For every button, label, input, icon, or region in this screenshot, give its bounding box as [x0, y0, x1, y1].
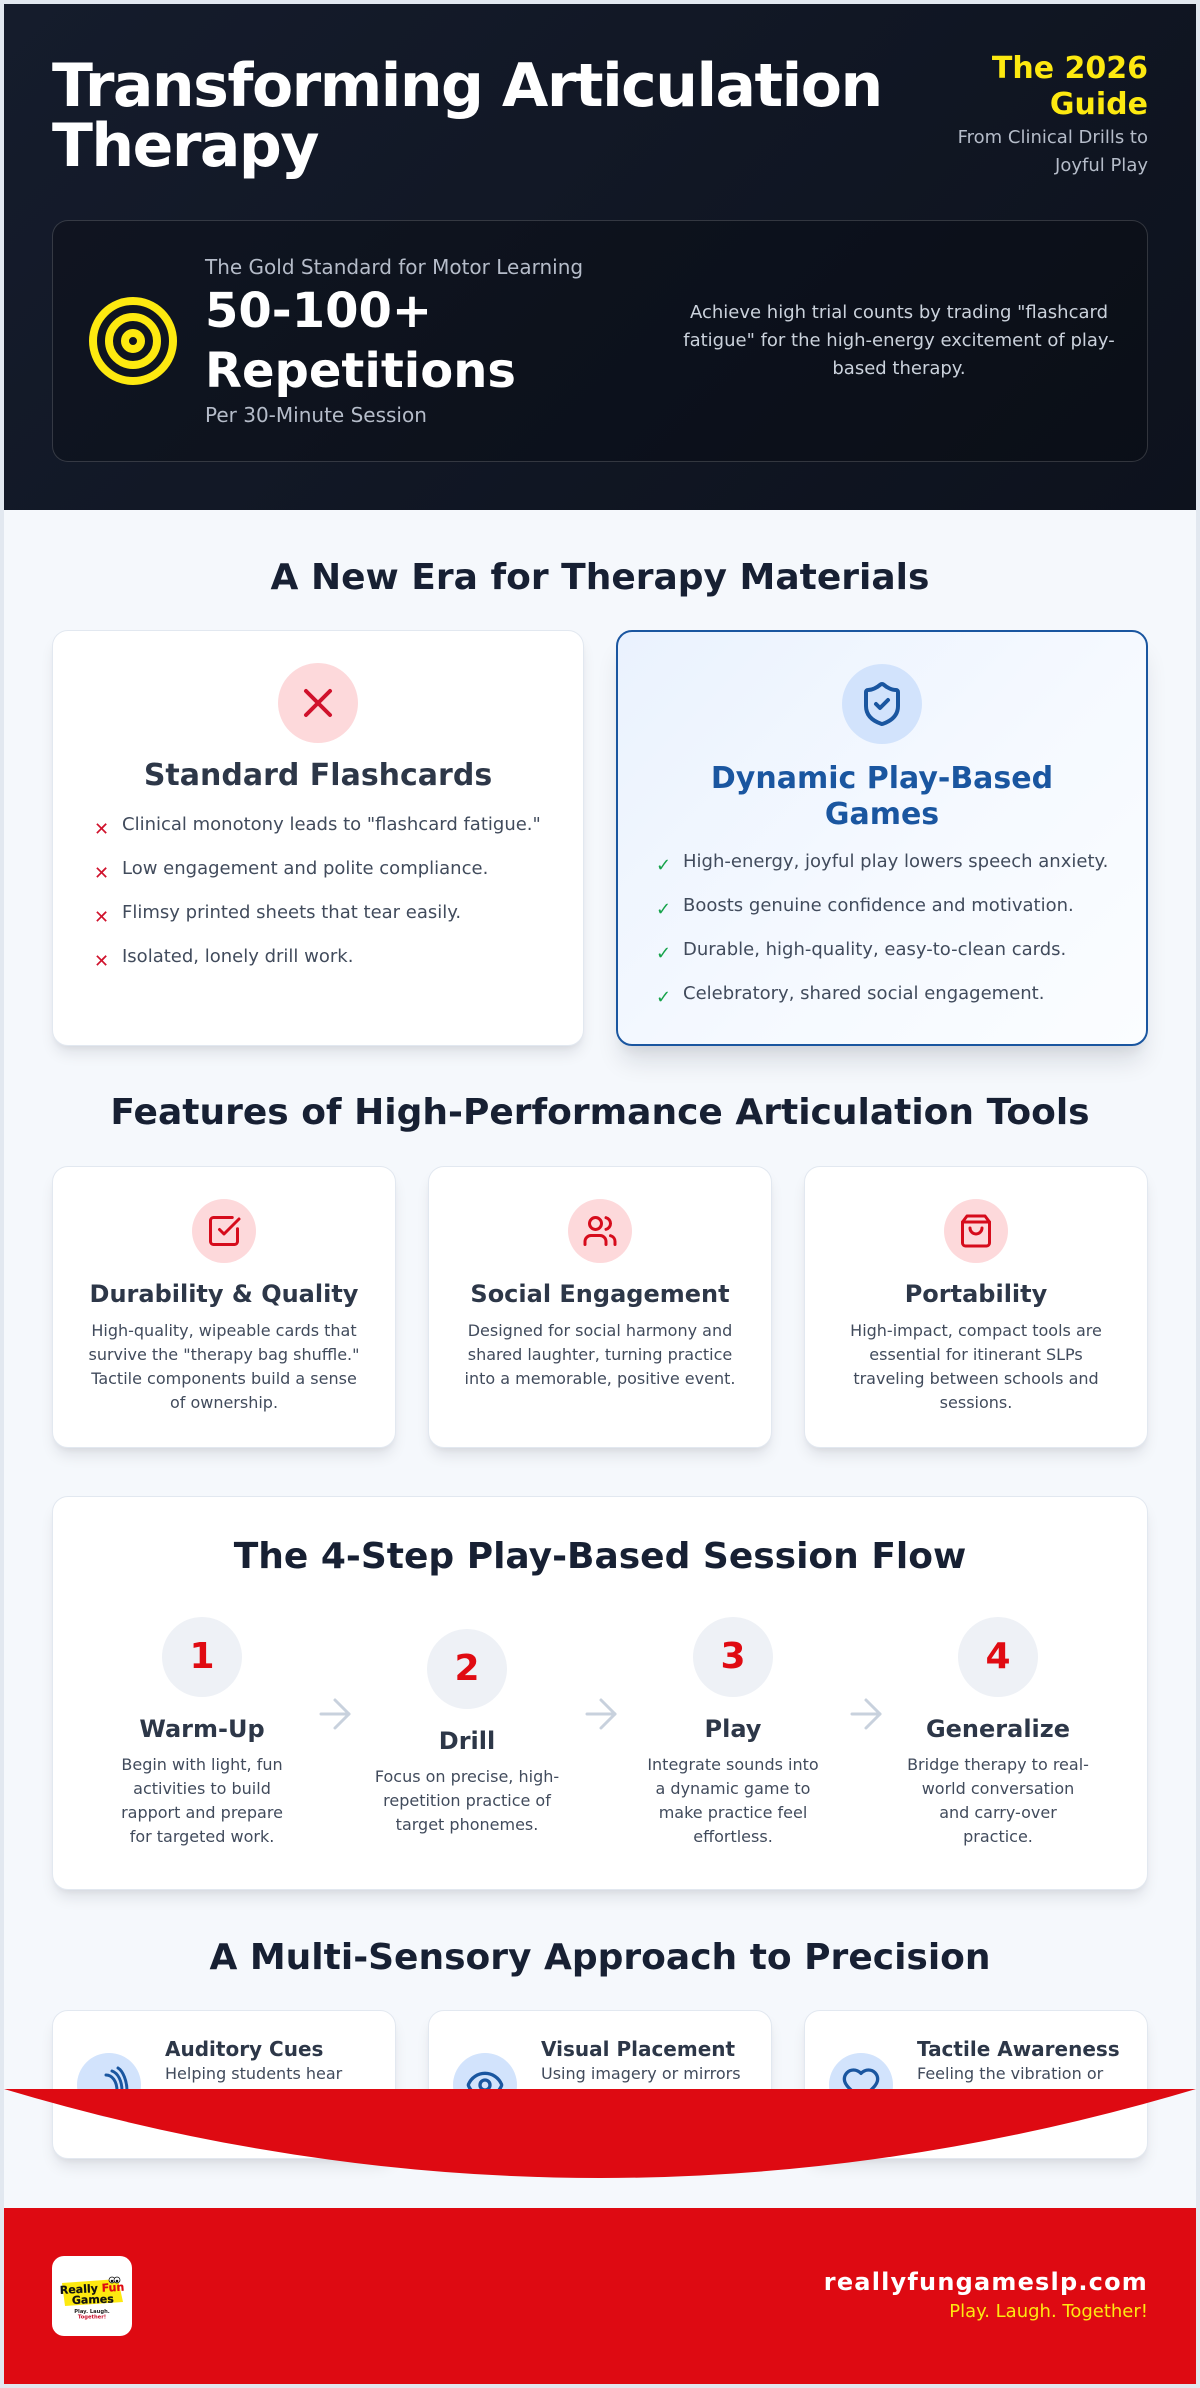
- step text: target phonemes.: [396, 1815, 538, 1834]
- list: benefits: ✓: [656, 855, 671, 876]
- arrow: [320, 1698, 350, 1730]
- panel: standard flashcards: [52, 630, 584, 1046]
- panel: portability: [804, 1166, 1148, 1448]
- feature title: Portability: [905, 1280, 1047, 1308]
- title: Therapy: [52, 111, 318, 181]
- step text: a dynamic game to: [656, 1779, 810, 1798]
- hero number: Repetitions: [205, 343, 516, 399]
- number badge: [693, 1617, 773, 1697]
- step text: repetition practice of: [383, 1791, 551, 1810]
- step text: [375, 1767, 559, 1834]
- step text: practice.: [963, 1827, 1033, 1846]
- hero description: fatigue" for the high-energy excitement of play-: [683, 330, 1115, 351]
- number badge: [427, 1629, 507, 1709]
- number badge: 3: [720, 1636, 746, 1677]
- step text: Bridge therapy to real-: [907, 1755, 1089, 1774]
- logo artwork: Together!: [78, 2314, 106, 2320]
- step text: Begin with light, fun: [121, 1755, 283, 1774]
- number badge: [958, 1617, 1038, 1697]
- hero number: [205, 283, 516, 399]
- feature title: Social Engagement: [470, 1280, 730, 1308]
- list: drawbacks: Low engagement and polite compliance.: [122, 858, 488, 879]
- step 1: [121, 1617, 283, 1846]
- header banner: [4, 4, 1196, 510]
- list: benefits: [656, 851, 1108, 1008]
- panel: tactile awareness: [804, 2010, 1148, 2159]
- hero description: Achieve high trial counts by trading "flashcard: [690, 302, 1108, 323]
- list: drawbacks: Clinical monotony leads to "flashcard fatigue.": [122, 814, 541, 835]
- logo artwork: Play. Laugh.: [74, 2309, 110, 2315]
- sense title: Auditory Cues: [165, 2037, 323, 2061]
- step 2: [375, 1629, 559, 1834]
- step text: activities to build: [133, 1779, 271, 1798]
- number badge: 4: [985, 1636, 1011, 1677]
- step title: Drill: [439, 1727, 495, 1755]
- guide subtitle: [958, 127, 1148, 176]
- card heading: Standard Flashcards: [144, 758, 492, 793]
- card heading: Games: [825, 797, 939, 832]
- logo artwork: [59, 2276, 125, 2320]
- panel: session flow: [52, 1496, 1148, 1890]
- logo: [52, 2256, 132, 2336]
- hero eyebrow: The Gold Standard for Motor Learning: [205, 255, 583, 279]
- panel: social engagement: [428, 1166, 772, 1448]
- card heading: Dynamic Play-Based: [711, 761, 1053, 796]
- feature text: into a memorable, positive event.: [465, 1369, 735, 1388]
- feature text: [465, 1321, 735, 1388]
- arrow: [586, 1698, 616, 1730]
- step title: Warm-Up: [139, 1715, 265, 1743]
- list: benefits: High-energy, joyful play lowers speech anxiety.: [683, 851, 1108, 872]
- panel: auditory cues: [52, 2010, 396, 2159]
- step title: Play: [705, 1715, 761, 1743]
- panel: durability and quality: [52, 1166, 396, 1448]
- hero description: based therapy.: [832, 358, 966, 379]
- icon: target: [89, 297, 177, 385]
- list: benefits: Durable, high-quality, easy-to-clean cards.: [683, 939, 1066, 960]
- number badge: 2: [454, 1648, 480, 1689]
- feature text: of ownership.: [170, 1393, 278, 1412]
- feature text: sessions.: [940, 1393, 1012, 1412]
- list: benefits: ✓: [656, 987, 671, 1008]
- step text: [907, 1755, 1089, 1846]
- list: drawbacks: ✕: [94, 819, 109, 840]
- step text: make practice feel: [659, 1803, 807, 1822]
- panel: visual placement: [428, 2010, 772, 2159]
- list: benefits: ✓: [656, 943, 671, 964]
- panel: hero statistic: [52, 220, 1148, 462]
- sense title: Tactile Awareness: [917, 2037, 1120, 2061]
- step text: and carry-over: [939, 1803, 1057, 1822]
- guide subtitle: From Clinical Drills to: [958, 127, 1148, 148]
- icon: eye: [453, 2053, 517, 2117]
- list: benefits: Boosts genuine confidence and motivation.: [683, 895, 1074, 916]
- feature text: High-quality, wipeable cards that: [91, 1321, 357, 1340]
- website: reallyfungameslp.com: [824, 2268, 1148, 2296]
- red curved divider: [4, 2089, 1196, 2178]
- feature text: High-impact, compact tools are: [850, 1321, 1102, 1340]
- number badge: [162, 1617, 242, 1697]
- step title: Generalize: [926, 1715, 1070, 1743]
- guide label: The 2026: [992, 51, 1148, 86]
- step text: Integrate sounds into: [647, 1755, 819, 1774]
- icon: users: [568, 1199, 632, 1263]
- step 4: [907, 1617, 1089, 1846]
- title: Transforming Articulation: [52, 51, 882, 121]
- step text: effortless.: [693, 1827, 773, 1846]
- feature text: [850, 1321, 1102, 1412]
- step text: [647, 1755, 819, 1846]
- title: [52, 51, 882, 181]
- guide subtitle: Joyful Play: [1055, 155, 1148, 176]
- icon: heart: [829, 2053, 893, 2117]
- number badge: 1: [189, 1636, 215, 1677]
- arrow: [850, 1698, 882, 1730]
- hero description: [683, 302, 1115, 379]
- step text: Focus on precise, high-: [375, 1767, 559, 1786]
- guide label: [992, 51, 1148, 122]
- feature text: traveling between schools and: [853, 1369, 1099, 1388]
- list: drawbacks: ✕: [94, 951, 109, 972]
- icon: bag: [944, 1199, 1008, 1263]
- step text: world conversation: [922, 1779, 1074, 1798]
- list: benefits: Celebratory, shared social engagement.: [683, 983, 1044, 1004]
- feature text: [88, 1321, 360, 1412]
- feature text: Designed for social harmony and: [468, 1321, 732, 1340]
- heading: session flow: The 4-Step Play-Based Session Flow: [234, 1536, 966, 1577]
- list: drawbacks: Isolated, lonely drill work.: [122, 946, 353, 967]
- icon: sound waves: [77, 2053, 141, 2117]
- feature text: Tactile components build a sense: [91, 1369, 357, 1388]
- list: drawbacks: [94, 814, 541, 972]
- logo artwork: Games: [72, 2293, 114, 2307]
- list: drawbacks: ✕: [94, 863, 109, 884]
- feature text: survive the "therapy bag shuffle.": [88, 1345, 360, 1364]
- heading: new era: A New Era for Therapy Materials: [271, 557, 929, 598]
- list: drawbacks: ✕: [94, 907, 109, 928]
- sense title: Visual Placement: [541, 2037, 735, 2061]
- hero number: 50-100+: [205, 283, 432, 339]
- icon: shield check in circle: [842, 664, 922, 744]
- card heading: [711, 761, 1053, 832]
- tagline: Play. Laugh. Together!: [949, 2301, 1148, 2322]
- step text: [121, 1755, 283, 1846]
- icon: square check: [192, 1199, 256, 1263]
- icon: x in circle: [278, 663, 358, 743]
- step 3: [647, 1617, 819, 1846]
- heading: features: Features of High-Performance Articulation Tools: [110, 1092, 1090, 1133]
- list: benefits: ✓: [656, 899, 671, 920]
- feature text: essential for itinerant SLPs: [869, 1345, 1083, 1364]
- sense text: Helping students hear: [165, 2064, 342, 2083]
- feature text: shared laughter, turning practice: [468, 1345, 732, 1364]
- sense text: Using imagery or mirrors: [541, 2064, 741, 2083]
- list: drawbacks: Flimsy printed sheets that tear easily.: [122, 902, 461, 923]
- step text: for targeted work.: [130, 1827, 274, 1846]
- heading: multi-sensory: A Multi-Sensory Approach to Precision: [209, 1937, 991, 1978]
- panel: dynamic play-based games: [616, 630, 1148, 1046]
- hero caption: Per 30-Minute Session: [205, 403, 427, 427]
- sense text: Feeling the vibration or: [917, 2064, 1103, 2083]
- logo artwork: Really Fun: [59, 2281, 125, 2297]
- footer band: [4, 2208, 1196, 2384]
- guide label: Guide: [1050, 87, 1148, 122]
- step text: rapport and prepare: [121, 1803, 283, 1822]
- feature title: Durability & Quality: [90, 1280, 358, 1308]
